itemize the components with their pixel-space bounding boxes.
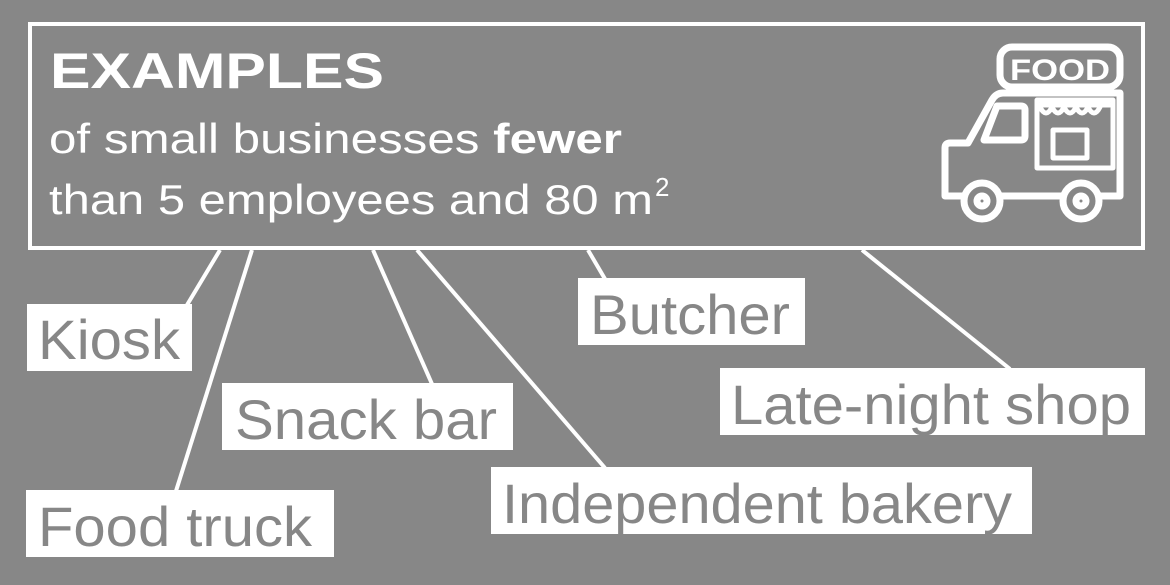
- icon: food truck: [945, 47, 1120, 219]
- label: Food truck: Food truck: [38, 495, 313, 558]
- label: Kiosk: Kiosk: [38, 308, 181, 371]
- connector lines: [176, 250, 1010, 491]
- label: Snack bar: Snack bar: [235, 388, 497, 451]
- icon: food truck: FOOD: [1010, 54, 1110, 87]
- label: Butcher: Butcher: [590, 283, 790, 346]
- header panel: [30, 24, 1143, 248]
- subtitle: [49, 115, 669, 223]
- label: Late-night shop: Late-night shop: [731, 373, 1131, 436]
- subtitle: 2: [655, 172, 669, 202]
- label: Independent bakery: Independent bakery: [502, 472, 1012, 535]
- subtitle: of small businesses fewer: [49, 115, 622, 162]
- subtitle: than 5 employees and 80 m: [49, 176, 653, 223]
- title: EXAMPLES: [50, 43, 384, 99]
